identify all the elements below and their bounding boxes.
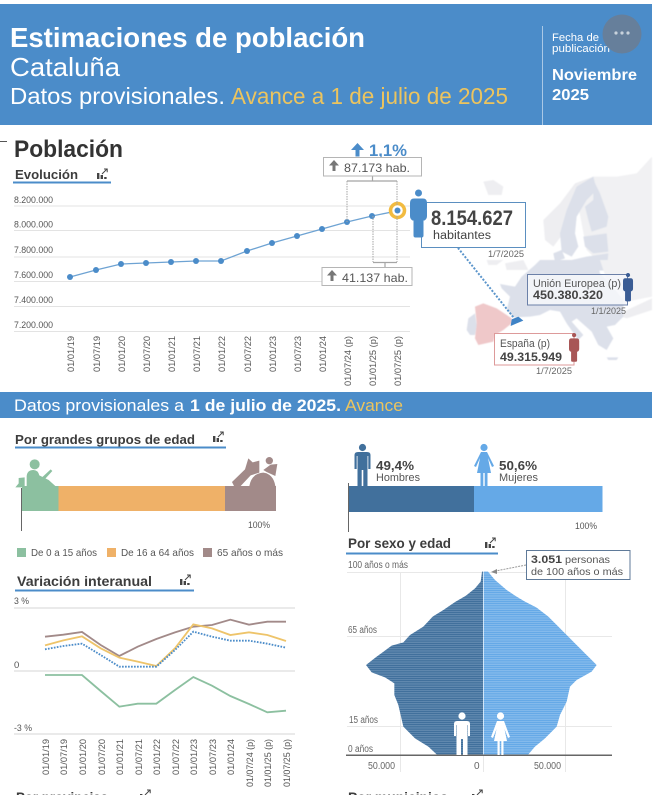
callout: Cataluña population xyxy=(410,190,526,260)
icon: person blue xyxy=(410,190,427,238)
callout: annual increase: 87.173 hab. xyxy=(344,161,410,175)
line chart: population xyxy=(14,195,410,386)
line chart: annual variation: 01/01/22 xyxy=(152,739,163,775)
line chart: annual variation: -3 % xyxy=(14,723,32,734)
line chart: population: 7.200.000 xyxy=(14,320,53,331)
women share: Mujeres xyxy=(499,472,538,484)
callout: España population: 1/7/2025 xyxy=(536,366,572,377)
line chart: annual variation: 01/01/25 (p) xyxy=(263,739,274,787)
annual growth brackets xyxy=(347,176,397,267)
callout: centenarians: de 100 años o más xyxy=(531,566,623,578)
highlight: latest value xyxy=(390,204,404,218)
subtitle: provisional data: Datos provisionales. xyxy=(10,83,225,109)
line chart: population: 01/07/20 xyxy=(142,336,153,372)
subtitle: advance date: Avance a 1 de julio de 2025 xyxy=(231,83,508,109)
callout: Cataluña population: 1/7/2025 xyxy=(488,249,524,260)
callout: annual increase xyxy=(324,158,422,176)
callout: España population: España (p) xyxy=(500,338,550,350)
line chart: annual variation: 01/07/20 xyxy=(97,739,108,775)
publication date: Noviembre xyxy=(552,67,637,84)
line chart: annual variation: 01/01/23 xyxy=(189,739,200,775)
line chart: annual variation xyxy=(14,596,295,787)
icon: man xyxy=(354,444,370,486)
line chart: population: 01/01/21 xyxy=(167,336,178,372)
pyramid chart: 50.000 xyxy=(534,761,561,772)
pyramid chart xyxy=(346,560,612,772)
line chart: annual variation: 01/07/21 xyxy=(134,739,145,775)
section heading: Población: Población xyxy=(14,136,123,163)
men share xyxy=(376,458,420,484)
section band: provisional data: Datos provisionales a xyxy=(14,396,185,415)
Portugal on map xyxy=(467,313,477,335)
callout: centenarians: personas xyxy=(565,554,610,566)
line chart: population: 01/07/21 xyxy=(192,336,203,372)
line chart: population: 01/01/25 (p) xyxy=(368,336,379,386)
callout: Unión Europea population: 450.380.320 xyxy=(533,288,603,302)
heading: age groups: Por grandes grupos de edad xyxy=(15,432,195,447)
men share: 49,4% xyxy=(376,458,414,473)
publication date: 2025 xyxy=(552,87,589,104)
pyramid chart: 100 años o más xyxy=(348,560,408,571)
panel: population pyramid xyxy=(346,535,630,772)
icon: child reading xyxy=(15,459,55,487)
stacked bar: age groups xyxy=(22,486,276,531)
callout: Unión Europea population: 1/1/2025 xyxy=(591,306,626,317)
line chart: population: 01/07/23 xyxy=(293,336,304,372)
line chart: annual variation: 01/07/24 (p) xyxy=(245,739,256,787)
panel: age groups xyxy=(15,432,283,559)
pyramid chart: 0 xyxy=(474,761,480,772)
Spain on map xyxy=(475,303,512,345)
panel: by sex xyxy=(348,444,602,532)
annual growth percentage: 1,1% xyxy=(369,141,407,160)
men share: Hombres xyxy=(376,472,420,484)
line chart: population: 01/01/24 xyxy=(318,336,329,372)
line chart: annual variation: 01/01/19 xyxy=(41,739,52,775)
heading: Evolución: Evolución xyxy=(15,167,78,182)
Catalonia on map xyxy=(511,317,523,326)
callout: España population: 49.315.949 xyxy=(500,350,562,364)
menu button xyxy=(602,14,642,54)
callout: half-year increase: 41.137 hab. xyxy=(342,271,408,285)
line chart: population: 01/01/23 xyxy=(268,336,279,372)
subtitle: region: Cataluña xyxy=(10,52,121,82)
heading: Evolución xyxy=(13,167,111,184)
legend: age groups: De 16 a 64 años xyxy=(121,547,194,559)
callout: España population xyxy=(494,333,579,377)
icon: person red xyxy=(569,333,579,362)
line chart: population: 7.400.000 xyxy=(14,295,53,306)
line chart: annual variation: 0 xyxy=(14,660,19,671)
line chart: population: 8.000.000 xyxy=(14,220,53,230)
line chart: annual variation: 01/01/20 xyxy=(78,739,89,775)
women share xyxy=(499,458,538,484)
stacked bar: sex: 100% xyxy=(575,521,597,532)
section band: provisional data: Avance xyxy=(345,396,403,415)
callout: Cataluña population: habitantes xyxy=(433,230,491,242)
publication date: Fecha de xyxy=(552,32,599,44)
heading: sex and age: Por sexo y edad xyxy=(348,535,451,551)
line chart: annual variation: 01/07/19 xyxy=(59,739,70,775)
line chart: population: 01/07/24 (p) xyxy=(343,336,354,386)
line chart: population: 01/01/20 xyxy=(117,336,128,372)
icon: man white xyxy=(454,712,470,755)
line chart: annual variation: 01/07/22 xyxy=(171,739,182,775)
legend: age groups xyxy=(17,547,283,559)
line chart: annual variation: 01/01/24 xyxy=(226,739,237,775)
women share: 50,6% xyxy=(499,458,537,473)
line chart: population: 8.200.000 xyxy=(14,195,53,206)
panel: population evolution xyxy=(13,141,422,386)
pyramid chart: 50.000 xyxy=(368,761,395,772)
publication date xyxy=(552,32,637,104)
line chart: population: 01/07/19 xyxy=(92,336,103,372)
publication date: publicación xyxy=(552,43,610,55)
panel: annual variation xyxy=(14,573,295,787)
line chart: annual variation: 01/01/21 xyxy=(115,739,126,775)
legend: age groups: De 0 a 15 años xyxy=(31,547,97,559)
legend: age groups: 65 años o más xyxy=(217,547,283,559)
pyramid chart: 15 años xyxy=(349,715,378,726)
tick mark xyxy=(0,141,7,142)
annual growth percentage xyxy=(351,141,407,160)
line chart: annual variation: 01/07/23 xyxy=(208,739,219,775)
heading: annual variation xyxy=(15,573,194,592)
section band: provisional data: 1 de julio de 2025. xyxy=(190,396,341,415)
line chart: population: 01/07/25 (p) xyxy=(393,336,404,386)
map of Europe xyxy=(458,157,652,360)
icon: woman xyxy=(474,444,494,486)
line chart: population: 01/07/22 xyxy=(243,336,254,372)
callout: centenarians xyxy=(491,550,630,580)
callout: Unión Europea population: Unión Europea (p) xyxy=(533,278,621,290)
icon: person dark blue xyxy=(623,273,633,301)
line chart: population: 01/01/22 xyxy=(217,336,228,372)
stacked bar: sex xyxy=(348,483,602,532)
pyramid chart: 65 años xyxy=(348,625,377,636)
line chart: population: 7.800.000 xyxy=(14,245,53,256)
heading: sex and age xyxy=(346,535,498,554)
section band: provisional data xyxy=(0,392,652,418)
line chart: annual variation: 01/07/25 (p) xyxy=(282,739,293,787)
line chart: population: 7.600.000 xyxy=(14,270,53,281)
callout: Unión Europea population xyxy=(528,273,633,317)
heading: annual variation: Variación interanual xyxy=(17,573,152,589)
header banner xyxy=(0,4,652,125)
stacked bar: age groups: 100% xyxy=(248,520,270,531)
callout: Cataluña population: 8.154.627 xyxy=(431,207,513,230)
line chart: population: 01/01/19 xyxy=(66,336,77,372)
callout: centenarians: 3.051 xyxy=(531,554,562,566)
icon: adult relaxing xyxy=(232,457,277,486)
line chart: annual variation: 3 % xyxy=(14,596,30,607)
pyramid chart: 0 años xyxy=(348,744,373,755)
icon: woman white xyxy=(491,712,510,755)
callout: half-year increase xyxy=(322,268,412,286)
title: Estimaciones de población xyxy=(10,22,365,53)
